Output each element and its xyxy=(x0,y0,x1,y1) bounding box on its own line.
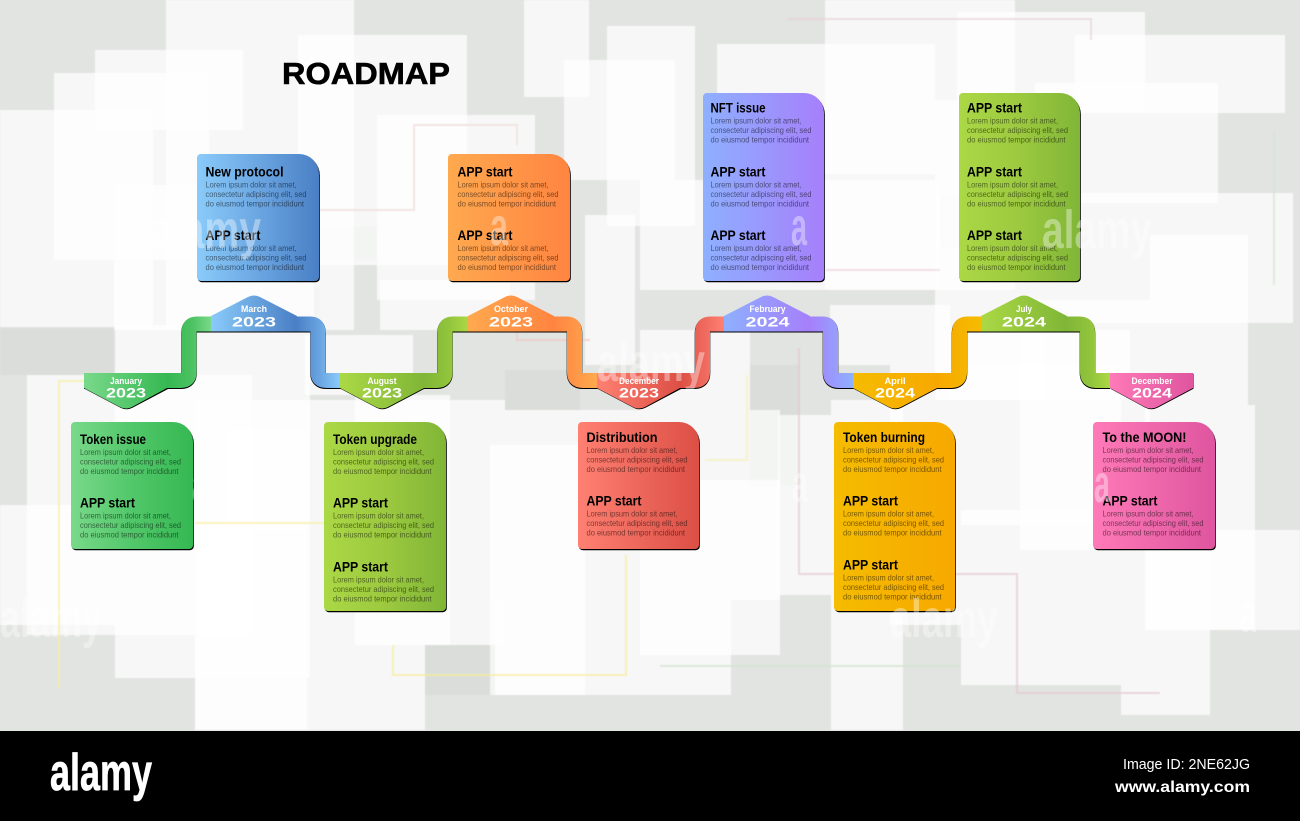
panel: Token upgrade: consectetur adipiscing elit, sed xyxy=(333,584,434,594)
segment: December 2024: December xyxy=(1132,376,1173,387)
footer url: www.alamy.com xyxy=(1114,779,1250,796)
panel: APP start lime: APP start xyxy=(967,100,1022,116)
panel: APP start orange: consectetur adipiscing elit, sed xyxy=(458,189,559,199)
segment: December 2023: December xyxy=(619,376,659,387)
segment: December 2024 xyxy=(1110,373,1193,408)
panel: Token burning: consectetur adipiscing elit, sed xyxy=(843,582,944,592)
timeline ribbon xyxy=(84,296,1194,409)
segment: October: 2023 xyxy=(489,314,533,330)
panel: Token issue: APP start xyxy=(80,495,135,511)
panel: To the MOON: consectetur adipiscing elit, sed xyxy=(1102,454,1204,464)
ribbon shadow xyxy=(84,325,1194,409)
panel: APP start lime: Lorem ipsum dolor sit amet, xyxy=(967,180,1058,190)
panel: To the MOON xyxy=(1093,422,1216,550)
panel: NFT issue: consectetur adipiscing elit, sed xyxy=(710,189,812,199)
panel: Token burning: do eiusmod tempor incididunt xyxy=(843,528,942,538)
panel: APP start lime: consectetur adipiscing elit, sed xyxy=(967,189,1068,199)
stock watermarks: a xyxy=(1240,584,1257,644)
segment: August xyxy=(340,324,468,408)
panel: NFT issue: Lorem ipsum dolor sit amet, xyxy=(710,243,802,253)
panel: New protocol: Lorem ipsum dolor sit amet, xyxy=(206,180,296,190)
segment: January: 2023 xyxy=(106,384,146,400)
panel: Distribution xyxy=(578,422,700,550)
panel: Token issue: consectetur adipiscing elit, sed xyxy=(80,520,181,530)
panel: Token burning: APP start xyxy=(843,556,898,572)
title: ROADMAP xyxy=(282,56,450,91)
panel: NFT issue: APP start xyxy=(710,227,766,243)
stock watermarks: alamy xyxy=(597,333,705,393)
panel: Token upgrade: APP start xyxy=(333,558,388,574)
panel: APP start orange: do eiusmod tempor incididunt xyxy=(458,262,557,272)
panel: Distribution: do eiusmod tempor incididunt xyxy=(586,464,686,474)
stock watermarks: alamy xyxy=(150,200,261,260)
panel: NFT issue: Lorem ipsum dolor sit amet, xyxy=(710,180,802,190)
panel: To the MOON: Lorem ipsum dolor sit amet, xyxy=(1102,445,1194,455)
panel: APP start lime: Lorem ipsum dolor sit amet, xyxy=(967,243,1058,253)
panel: New protocol: do eiusmod tempor incididunt xyxy=(206,262,305,272)
panel: New protocol: APP start xyxy=(206,227,261,243)
panel: APP start orange xyxy=(448,154,571,282)
segment: July: July xyxy=(1016,304,1033,315)
panel: Token burning: do eiusmod tempor incididunt xyxy=(843,592,942,602)
segment: January xyxy=(84,324,211,408)
panel: Token burning xyxy=(834,422,956,612)
stock watermarks: alamy xyxy=(1042,200,1152,260)
panel: APP start orange: APP start xyxy=(458,227,513,243)
panel: Token issue: Lorem ipsum dolor sit amet, xyxy=(80,447,171,457)
panel: NFT issue: do eiusmod tempor incididunt xyxy=(710,134,810,144)
panel: Token issue: do eiusmod tempor incididunt xyxy=(80,530,179,540)
panel: NFT issue: consectetur adipiscing elit, sed xyxy=(710,252,812,262)
panel: Distribution: do eiusmod tempor incididunt xyxy=(586,528,686,538)
panel: New protocol: Lorem ipsum dolor sit amet, xyxy=(206,243,296,253)
panel: New protocol: consectetur adipiscing elit, sed xyxy=(206,252,307,262)
stock watermarks: alamy xyxy=(890,589,998,649)
panel: APP start orange: do eiusmod tempor incididunt xyxy=(458,198,557,208)
panel: Token upgrade: Token upgrade xyxy=(333,431,417,447)
panel: NFT issue: Lorem ipsum dolor sit amet, xyxy=(710,116,802,126)
segment: January: January xyxy=(110,376,143,387)
footer bar xyxy=(0,731,1300,821)
panel: APP start lime: Lorem ipsum dolor sit amet, xyxy=(967,116,1058,126)
panel: Token upgrade: do eiusmod tempor incididunt xyxy=(333,530,432,540)
panel: Token burning: Token burning xyxy=(843,429,925,445)
segment: December 2023 xyxy=(597,324,724,408)
panel: NFT issue: APP start xyxy=(710,164,766,180)
panel: Token issue: Token issue xyxy=(80,431,146,447)
panel: APP start orange: Lorem ipsum dolor sit amet, xyxy=(458,243,548,253)
panel: Distribution: APP start xyxy=(586,493,642,509)
footer image id: Image ID: 2NE62JG xyxy=(1123,756,1250,773)
panel: New protocol: New protocol xyxy=(206,164,284,180)
panel: APP start lime: do eiusmod tempor incididunt xyxy=(967,198,1066,208)
panel: Distribution: Distribution xyxy=(586,429,658,445)
segment: July xyxy=(981,296,1110,380)
panel: Token burning: consectetur adipiscing elit, sed xyxy=(843,518,944,528)
panel: NFT issue: do eiusmod tempor incididunt xyxy=(710,198,810,208)
segment: October xyxy=(468,296,597,380)
panel: APP start lime: APP start xyxy=(967,164,1022,180)
segment: February: February xyxy=(750,304,786,315)
panel: Token upgrade: Lorem ipsum dolor sit amet, xyxy=(333,447,424,457)
panel: Token burning: APP start xyxy=(843,493,898,509)
panel: Token burning: Lorem ipsum dolor sit amet, xyxy=(843,445,934,455)
segment: April: 2024 xyxy=(875,384,915,400)
stock watermarks: a xyxy=(490,197,509,257)
segment: April xyxy=(853,324,981,408)
panel: APP start lime: APP start xyxy=(967,227,1022,243)
panel: Token upgrade: Lorem ipsum dolor sit amet, xyxy=(333,574,424,584)
panel: To the MOON: do eiusmod tempor incididunt xyxy=(1102,528,1202,538)
panel: APP start lime xyxy=(959,93,1081,282)
panel: Token upgrade: Lorem ipsum dolor sit amet, xyxy=(333,511,424,521)
segment: March xyxy=(211,296,340,380)
panel: NFT issue xyxy=(703,93,825,282)
panel: Token upgrade: APP start xyxy=(333,495,388,511)
panel: Token upgrade: do eiusmod tempor incididunt xyxy=(333,466,432,476)
panel: APP start lime: consectetur adipiscing elit, sed xyxy=(967,125,1068,135)
panel: Token upgrade: consectetur adipiscing elit, sed xyxy=(333,456,434,466)
segment: December 2024: 2024 xyxy=(1132,384,1172,400)
segment: July: 2024 xyxy=(1002,314,1046,330)
panel: To the MOON: consectetur adipiscing elit, sed xyxy=(1102,518,1204,528)
segment: August: August xyxy=(368,376,397,387)
panel: Token burning: Lorem ipsum dolor sit amet, xyxy=(843,509,934,519)
panel: Token upgrade xyxy=(324,422,447,612)
panel: Token burning: Lorem ipsum dolor sit amet, xyxy=(843,572,934,582)
stock watermarks xyxy=(0,197,1257,649)
panel: Token burning: consectetur adipiscing elit, sed xyxy=(843,454,944,464)
panel: Distribution: Lorem ipsum dolor sit amet, xyxy=(586,445,678,455)
stock watermarks: a xyxy=(791,197,808,257)
panel: APP start lime: do eiusmod tempor incididunt xyxy=(967,134,1066,144)
panel: To the MOON: To the MOON! xyxy=(1102,429,1186,445)
panel: To the MOON: do eiusmod tempor incididunt xyxy=(1102,464,1202,474)
segment: December 2023: 2023 xyxy=(619,384,659,400)
panel: Token issue xyxy=(71,422,194,550)
segment: March: March xyxy=(241,304,267,315)
panel: APP start orange: APP start xyxy=(458,164,513,180)
segment: April: April xyxy=(884,376,906,387)
stock watermarks: a xyxy=(792,454,809,514)
panel: Distribution: consectetur adipiscing elit, sed xyxy=(586,454,688,464)
segment: February: 2024 xyxy=(746,314,790,330)
panel: NFT issue: do eiusmod tempor incididunt xyxy=(710,262,810,272)
panel: New protocol: do eiusmod tempor incididunt xyxy=(206,198,305,208)
panel: APP start orange: Lorem ipsum dolor sit amet, xyxy=(458,180,548,190)
panel: Token burning: do eiusmod tempor incididunt xyxy=(843,464,942,474)
panel: Token upgrade: consectetur adipiscing elit, sed xyxy=(333,520,434,530)
panel: APP start orange: consectetur adipiscing elit, sed xyxy=(458,252,559,262)
panel: Token issue: consectetur adipiscing elit, sed xyxy=(80,456,181,466)
panel: APP start lime: consectetur adipiscing elit, sed xyxy=(967,252,1068,262)
segment: March: 2023 xyxy=(232,314,276,330)
segment: February xyxy=(724,296,853,380)
stock watermarks: alamy xyxy=(0,589,102,649)
panel: To the MOON: APP start xyxy=(1102,493,1158,509)
panel: Distribution: Lorem ipsum dolor sit amet, xyxy=(586,509,678,519)
stock watermarks: a xyxy=(192,454,206,514)
stock watermarks: a xyxy=(1094,454,1111,514)
segment: August: 2023 xyxy=(362,384,402,400)
panel: Distribution: consectetur adipiscing elit, sed xyxy=(586,518,688,528)
panel: APP start lime: do eiusmod tempor incididunt xyxy=(967,262,1066,272)
panel: Token issue: Lorem ipsum dolor sit amet, xyxy=(80,511,171,521)
panel: NFT issue: NFT issue xyxy=(710,100,766,116)
panel: New protocol: consectetur adipiscing elit, sed xyxy=(206,189,307,199)
panel: Token upgrade: do eiusmod tempor incididunt xyxy=(333,594,432,604)
segment: October: October xyxy=(494,304,528,315)
footer logo: alamy xyxy=(50,744,152,802)
panel: NFT issue: consectetur adipiscing elit, sed xyxy=(710,125,812,135)
panel: New protocol xyxy=(197,154,320,282)
panel: To the MOON: Lorem ipsum dolor sit amet, xyxy=(1102,509,1194,519)
panel: Token issue: do eiusmod tempor incididunt xyxy=(80,466,179,476)
